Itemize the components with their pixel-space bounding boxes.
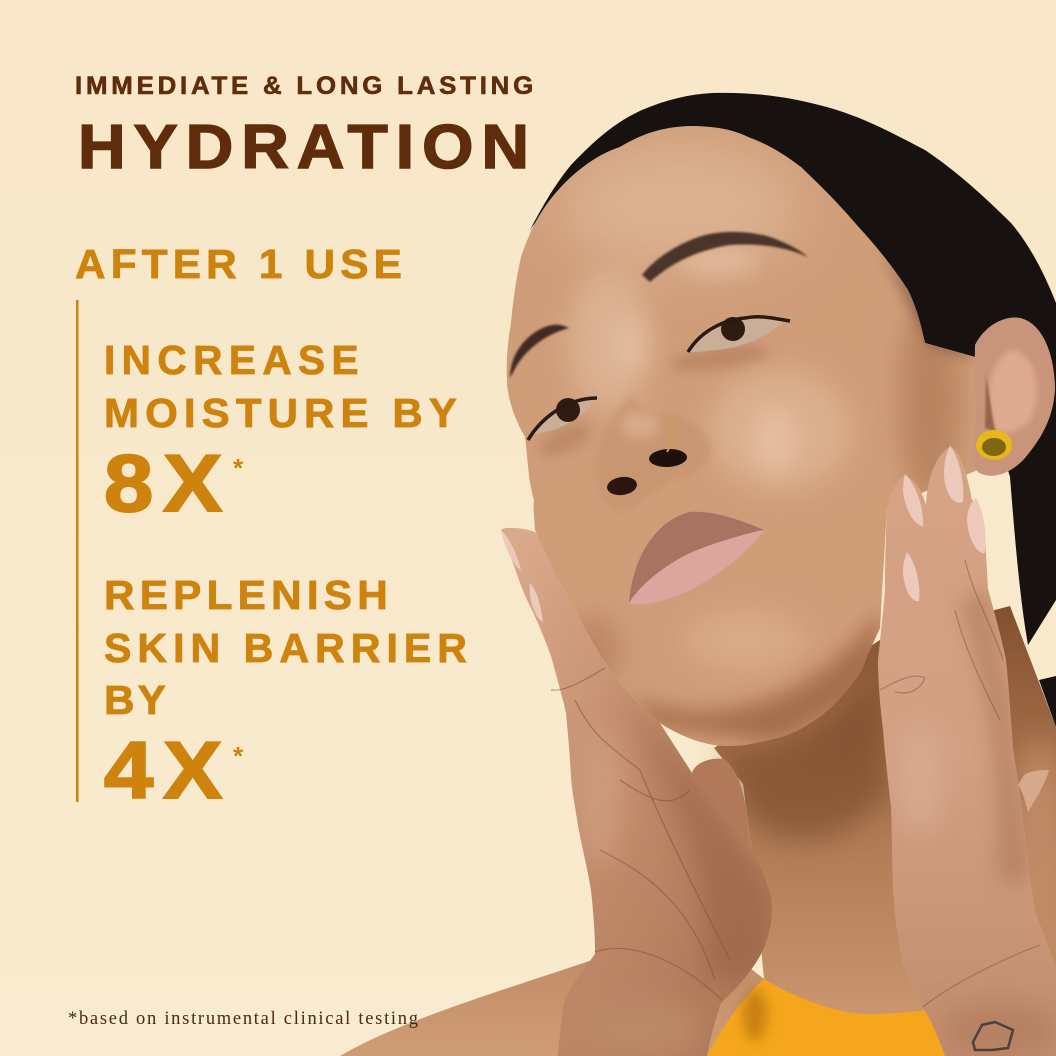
hair <box>530 93 1056 645</box>
shirt shadow <box>743 989 767 1041</box>
ear inner <box>988 351 1037 433</box>
neck right highlight <box>1015 740 1056 980</box>
right eye <box>688 317 790 352</box>
photo: woman touching her face <box>340 93 1056 1056</box>
face shading and highlights <box>535 145 975 745</box>
subheading: after 1 use: AFTER 1 USE <box>75 241 407 287</box>
left eye <box>528 398 597 440</box>
left hand back finger <box>692 759 752 855</box>
stat: skin barrier: REPLENISH <box>104 572 393 618</box>
right hand pinky behind <box>1018 770 1049 812</box>
right hand shading <box>900 590 1056 1056</box>
stat: skin barrier: * <box>233 741 244 771</box>
stat: moisture: * <box>233 453 244 483</box>
neck and shoulder <box>340 606 1056 1056</box>
stat: moisture: MOISTURE BY <box>104 390 463 436</box>
eyebrows <box>642 232 808 282</box>
nose ring <box>667 421 672 452</box>
ear <box>972 317 1055 476</box>
stat: moisture: 8X <box>104 439 232 529</box>
vertical rule <box>76 300 78 802</box>
stat: skin barrier: 4X <box>104 726 232 816</box>
lips <box>629 512 764 603</box>
stat: skin barrier <box>104 572 473 816</box>
right hand <box>878 446 1056 1056</box>
shirt <box>707 979 945 1056</box>
stat: moisture <box>104 337 463 529</box>
stat: moisture: INCREASE <box>104 337 365 383</box>
left hand shading <box>584 719 771 1048</box>
face <box>507 126 978 746</box>
left hand creases <box>551 668 730 1000</box>
heading: hydration: HYDRATION <box>78 113 537 182</box>
footnote: *based on instrumental clinical testing <box>68 1009 418 1029</box>
stat: skin barrier: SKIN BARRIER <box>104 625 473 671</box>
left hand <box>501 528 772 1056</box>
right hand creases <box>880 560 1040 1007</box>
hair behind neck <box>1039 676 1056 727</box>
neck shadow <box>720 680 890 840</box>
tattoo <box>973 1022 1013 1050</box>
nose <box>594 395 711 512</box>
stat: skin barrier: BY <box>104 677 169 723</box>
heading: immediate and long lasting: IMMEDIATE & LONG LASTING <box>75 73 537 100</box>
earring <box>976 430 1012 460</box>
fingernails <box>501 446 986 622</box>
